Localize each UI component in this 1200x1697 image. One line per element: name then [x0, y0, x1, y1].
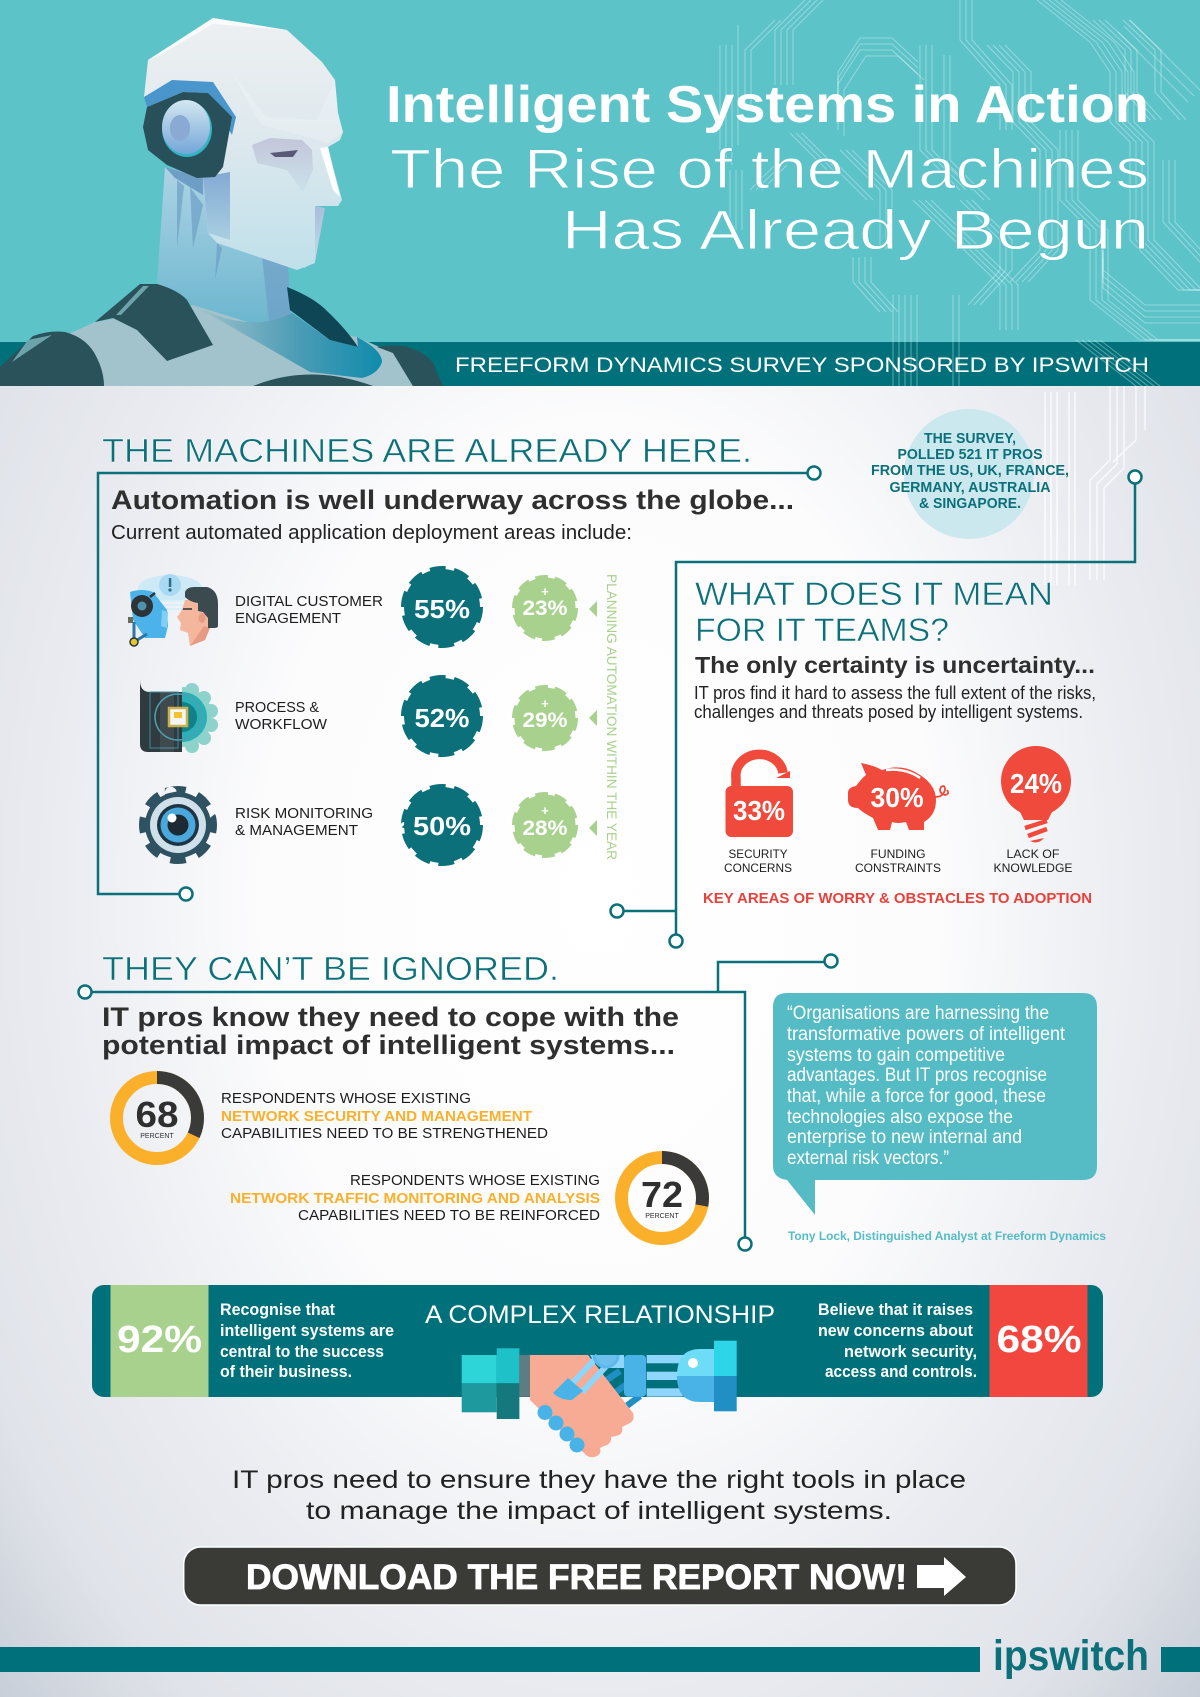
text: network security: CAPABILITIES NEED TO BE STRENGTHENED — [221, 1126, 548, 1142]
subheading: potential impact of intelligent systems... — [102, 1030, 675, 1060]
title — [386, 76, 1149, 261]
heading: THE MACHINES ARE ALREADY HERE. — [102, 432, 752, 469]
icon labels — [724, 849, 1073, 875]
stat gear: 50% — [404, 787, 480, 863]
subheading: The only certainty is uncertainty... — [695, 652, 1095, 678]
icon labels: SECURITY — [728, 849, 788, 861]
red caption: KEY AREAS OF WORRY & OBSTACLES TO ADOPTION — [703, 891, 1092, 907]
callout: survey summary — [871, 409, 1069, 539]
heading: FOR IT TEAMS? — [695, 612, 949, 648]
arrow — [589, 710, 597, 726]
body text: challenges and threats posed by intelligent systems. — [694, 702, 1083, 722]
connector frame — [78, 954, 838, 1250]
closing statement — [232, 1466, 966, 1525]
robot head — [304, 206, 325, 268]
callout: survey summary: FROM THE US, UK, FRANCE, — [871, 463, 1069, 479]
text: believe: new concerns about — [818, 1322, 973, 1340]
speech bubble: analyst quote: transformative powers of intelligent — [787, 1024, 1066, 1045]
panel: what does it mean for it teams — [610, 470, 1142, 948]
stat gear: +23%: 23% — [522, 597, 568, 620]
label: digital customer engagement: ENGAGEMENT — [235, 611, 341, 627]
stat gear: 52%: 52% — [414, 703, 470, 733]
intro text: Current automated application deployment areas include: — [111, 522, 632, 544]
text: network traffic: NETWORK TRAFFIC MONITORING AND ANALYSIS — [230, 1191, 600, 1207]
title: Has Already Begun — [562, 198, 1149, 261]
heading: THEY CAN’T BE IGNORED. — [102, 950, 559, 987]
subheading — [102, 1002, 679, 1060]
text: network traffic: CAPABILITIES NEED TO BE REINFORCED — [298, 1208, 600, 1224]
arrow — [589, 820, 597, 836]
body text: IT pros find it hard to assess the full extent of the risks, — [694, 683, 1096, 703]
stat gear: 52% — [404, 678, 480, 754]
stat gear: +28% — [514, 794, 576, 856]
donut chart: 72 percent: PERCENT — [645, 1213, 679, 1220]
panel: they can't be ignored — [78, 950, 838, 1250]
text: believe: Believe that it raises — [818, 1301, 973, 1319]
label: process and workflow — [235, 700, 327, 733]
arrow — [589, 601, 597, 617]
text: network security — [221, 1091, 548, 1142]
label: digital customer engagement — [235, 594, 383, 627]
closing statement: to manage the impact of intelligent systems. — [306, 1497, 892, 1525]
speech bubble: analyst quote — [773, 993, 1097, 1215]
stat gear: 55% — [404, 569, 480, 645]
survey strapline: FREEFORM DYNAMICS SURVEY SPONSORED BY IPSWITCH — [455, 354, 1149, 377]
icon: light bulb 24%: 24% — [1010, 768, 1062, 799]
panel: a complex relationship — [92, 1285, 1103, 1397]
text: network security: NETWORK SECURITY AND MANAGEMENT — [221, 1109, 532, 1125]
stat: 68% — [990, 1285, 1088, 1397]
stat gear: +29%: + — [541, 696, 549, 711]
icon: open padlock 33% — [726, 754, 793, 837]
donut chart: 72 percent — [622, 1158, 702, 1238]
label: process and workflow: PROCESS & — [235, 700, 319, 716]
icon: arrow — [917, 1557, 966, 1596]
heading — [695, 576, 1053, 648]
robot ear — [144, 80, 236, 135]
stat gear: +28%: 28% — [522, 817, 568, 840]
heading: WHAT DOES IT MEAN — [695, 576, 1053, 612]
icon labels: LACK OF — [1006, 849, 1060, 861]
vertical label: planning automation: PLANNING AUTOMATION WITHIN THE YEAR — [604, 574, 619, 860]
speech bubble: analyst quote: external risk vectors.” — [787, 1148, 949, 1169]
stat: 92%: 92% — [117, 1319, 202, 1361]
stat: 68%: 68% — [996, 1319, 1082, 1361]
text: believe: access and controls. — [825, 1363, 977, 1381]
illustration: robot head and shoulders — [0, 18, 443, 386]
connector frame — [98, 466, 820, 900]
quote attribution: Tony Lock, Distinguished Analyst at Freeform Dynamics — [788, 1229, 1106, 1243]
faint circuit traces below header — [1045, 386, 1145, 585]
illustration: human and robot handshake — [462, 1341, 737, 1457]
callout: survey summary: THE SURVEY, — [924, 431, 1016, 447]
stat: 92% — [110, 1285, 208, 1397]
subheading: Automation is well underway across the globe... — [111, 485, 794, 515]
icon: light bulb 24% — [1001, 746, 1071, 842]
label: risk monitoring and management: & MANAGEMENT — [235, 823, 358, 839]
subheading: IT pros know they need to cope with the — [102, 1002, 679, 1032]
call to action button: DOWNLOAD THE FREE REPORT NOW! — [246, 1558, 907, 1597]
label: risk monitoring and management — [235, 806, 373, 839]
stat gear: +23%: + — [541, 584, 549, 599]
stat gear: 50%: 50% — [413, 811, 471, 841]
text: recognise: of their business. — [220, 1363, 352, 1381]
icon: process chip and book — [140, 680, 218, 753]
connector frame — [610, 470, 1142, 948]
text: recognise: central to the success — [220, 1343, 384, 1361]
text: believe — [818, 1301, 977, 1381]
title: Intelligent Systems in Action — [386, 76, 1149, 134]
icon labels: KNOWLEDGE — [994, 863, 1073, 875]
icon: open padlock 33%: 33% — [733, 795, 785, 826]
stat gear: +23% — [514, 578, 576, 638]
icon labels: CONSTRAINTS — [855, 863, 941, 875]
call to action button — [184, 1547, 1016, 1605]
header banner — [0, 0, 1200, 386]
callout: survey summary: GERMANY, AUSTRALIA — [890, 480, 1051, 496]
logo: ipswitch: ipswitch — [993, 1632, 1149, 1680]
callout: survey summary: & SINGAPORE. — [919, 496, 1021, 512]
robot eye — [252, 138, 313, 192]
title: The Rise of the Machines — [390, 137, 1149, 200]
donut chart: 68 percent: PERCENT — [140, 1133, 174, 1140]
icon labels: CONCERNS — [724, 863, 792, 875]
text: network security: RESPONDENTS WHOSE EXISTING — [221, 1091, 471, 1107]
speech bubble: analyst quote: advantages. But IT pros recognise — [787, 1065, 1047, 1086]
label: process and workflow: WORKFLOW — [235, 717, 327, 733]
icon: piggy bank 30% — [848, 763, 948, 830]
callout: survey summary: POLLED 521 IT PROS — [898, 447, 1043, 463]
speech bubble: analyst quote: that, while a force for good, these — [787, 1086, 1046, 1107]
label: digital customer engagement: DIGITAL CUSTOMER — [235, 594, 383, 610]
text: recognise: Recognise that — [220, 1301, 335, 1319]
stat gear: 55%: 55% — [414, 594, 470, 624]
label: risk monitoring and management: RISK MONITORING — [235, 806, 373, 822]
text: network traffic — [230, 1173, 600, 1224]
robot shoulders — [0, 332, 104, 386]
icon: piggy bank 30%: 30% — [870, 782, 924, 813]
body text — [694, 683, 1096, 722]
icon labels: FUNDING — [870, 849, 926, 861]
panel: the machines are already here — [98, 432, 820, 900]
icon: eye in gear — [139, 786, 217, 864]
speech bubble: analyst quote: enterprise to new internal and — [787, 1127, 1022, 1148]
text: network traffic: RESPONDENTS WHOSE EXISTING — [350, 1173, 600, 1189]
stat gear: +29% — [514, 688, 576, 748]
robot neck — [157, 167, 292, 330]
donut chart: 68 percent: 68 — [136, 1094, 178, 1135]
robot body — [0, 305, 413, 386]
stat gear: +29%: 29% — [522, 709, 568, 732]
closing statement: IT pros need to ensure they have the right tools in place — [232, 1466, 966, 1494]
speech bubble: analyst quote: systems to gain competitive — [787, 1045, 1005, 1066]
stat gear: +28%: + — [541, 803, 549, 818]
speech bubble: analyst quote: technologies also expose the — [787, 1107, 1013, 1128]
text: recognise — [220, 1301, 394, 1381]
footer bar — [0, 1647, 1200, 1672]
donut chart: 68 percent — [116, 1078, 198, 1158]
speech bubble: analyst quote: “Organisations are harnessing the — [787, 1003, 1049, 1024]
icon: robot and human — [128, 574, 218, 646]
heading: A COMPLEX RELATIONSHIP — [425, 1301, 775, 1329]
donut chart: 72 percent: 72 — [641, 1174, 683, 1215]
text: believe: network security, — [844, 1343, 977, 1361]
text: recognise: intelligent systems are — [220, 1322, 394, 1340]
